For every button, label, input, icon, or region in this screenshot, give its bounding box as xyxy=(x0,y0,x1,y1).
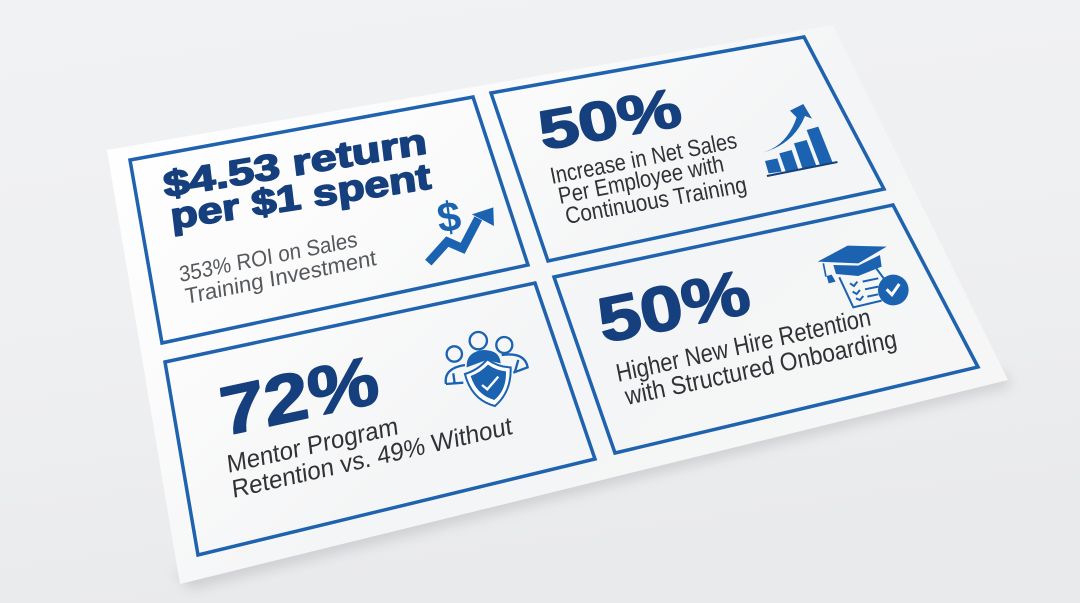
text: Higher New Hire Retention with Structured Onboarding: Higher New Hire Retention xyxy=(614,304,873,388)
stat: 50%: 50% xyxy=(533,76,686,162)
stat: 50%: 50% xyxy=(592,257,756,357)
icon: bar chart with rising arrow xyxy=(761,104,838,177)
heading: $4.53 return per $1 spent: per $1 spent xyxy=(168,155,433,237)
panel: new hire retention xyxy=(554,205,978,453)
text: Increase in Net Sales Per Employee with Continuous Training xyxy=(548,127,749,229)
stat: 72%: 72% xyxy=(216,341,383,451)
panel 3 border xyxy=(165,283,595,555)
panel 4 border xyxy=(554,205,978,453)
text: Increase in Net Sales Per Employee with Continuous Training: Increase in Net Sales xyxy=(548,127,739,189)
panel: mentor program xyxy=(165,283,595,555)
heading: $4.53 return per $1 spent: $4.53 return xyxy=(161,120,429,205)
icon: dollar with rising arrow xyxy=(428,192,494,263)
panel: ROI xyxy=(130,97,528,343)
panel 2 border xyxy=(491,37,884,261)
paper sheet xyxy=(107,25,1008,584)
text: Increase in Net Sales Per Employee with Continuous Training: Per Employee with xyxy=(556,150,726,209)
text: 353% ROI on Sales Training Investment: 353% ROI on Sales xyxy=(178,227,359,287)
icon: team with shield xyxy=(446,332,528,406)
text: Increase in Net Sales Per Employee with Continuous Training: Continuous Training xyxy=(563,171,749,229)
icon: dollar with rising arrow: $ xyxy=(434,192,464,242)
heading: $4.53 return per $1 spent xyxy=(161,120,433,237)
text: 353% ROI on Sales Training Investment: Training Investment xyxy=(184,245,378,309)
panel: net sales xyxy=(491,37,884,261)
paper shadow xyxy=(175,372,1012,590)
icon: graduation cap with checklist xyxy=(818,246,909,307)
panel 1 border xyxy=(130,97,528,343)
text: Mentor Program Retention vs. 49% Without: Mentor Program xyxy=(225,412,400,479)
text: Higher New Hire Retention with Structured Onboarding: with Structured Onboarding xyxy=(622,325,899,411)
text: Mentor Program Retention vs. 49% Without: Retention vs. 49% Without xyxy=(230,412,514,504)
